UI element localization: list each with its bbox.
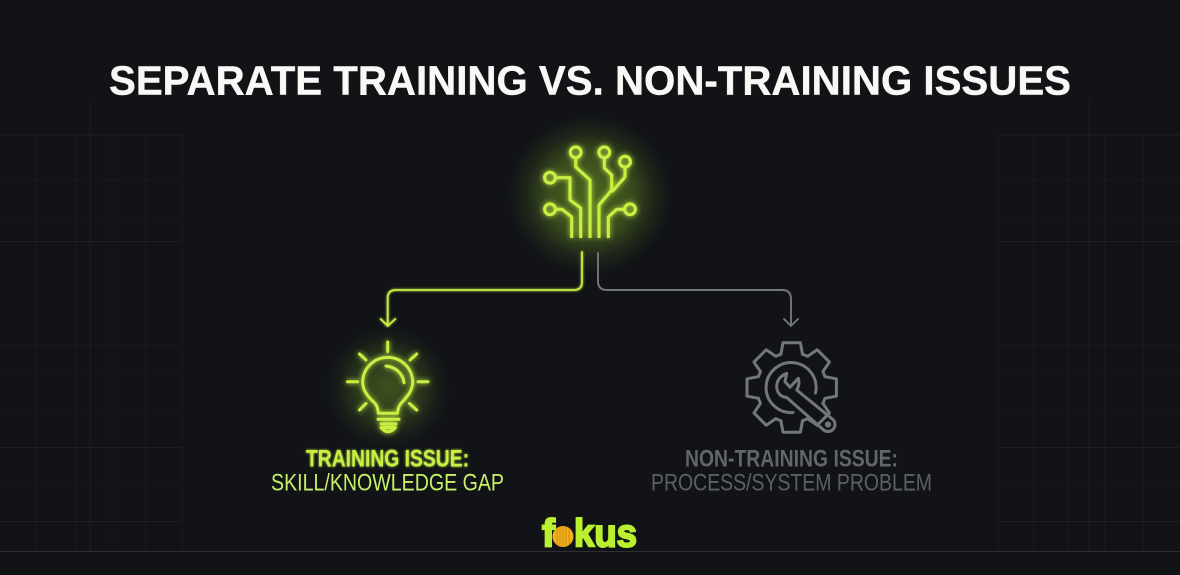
text: skill gap: SKILL/KNOWLEDGE GAP bbox=[271, 470, 504, 496]
logo: fokus: kus bbox=[574, 512, 637, 556]
logo: fokus bbox=[542, 512, 637, 556]
icon: circuit tree bbox=[508, 115, 672, 275]
icon: gear with wrench bbox=[747, 343, 836, 432]
text: process problem: PROCESS/SYSTEM PROBLEM bbox=[651, 470, 932, 496]
heading: training issue: TRAINING ISSUE: bbox=[306, 446, 469, 472]
title: SEPARATE TRAINING VS. NON-TRAINING ISSUES bbox=[109, 58, 1071, 104]
arrow: to training issue bbox=[381, 252, 582, 326]
heading: non-training issue: NON-TRAINING ISSUE: bbox=[685, 446, 898, 472]
icon: light bulb bbox=[326, 326, 450, 450]
logo: fokus: f bbox=[542, 512, 556, 556]
arrow: to non-training issue bbox=[598, 253, 798, 326]
